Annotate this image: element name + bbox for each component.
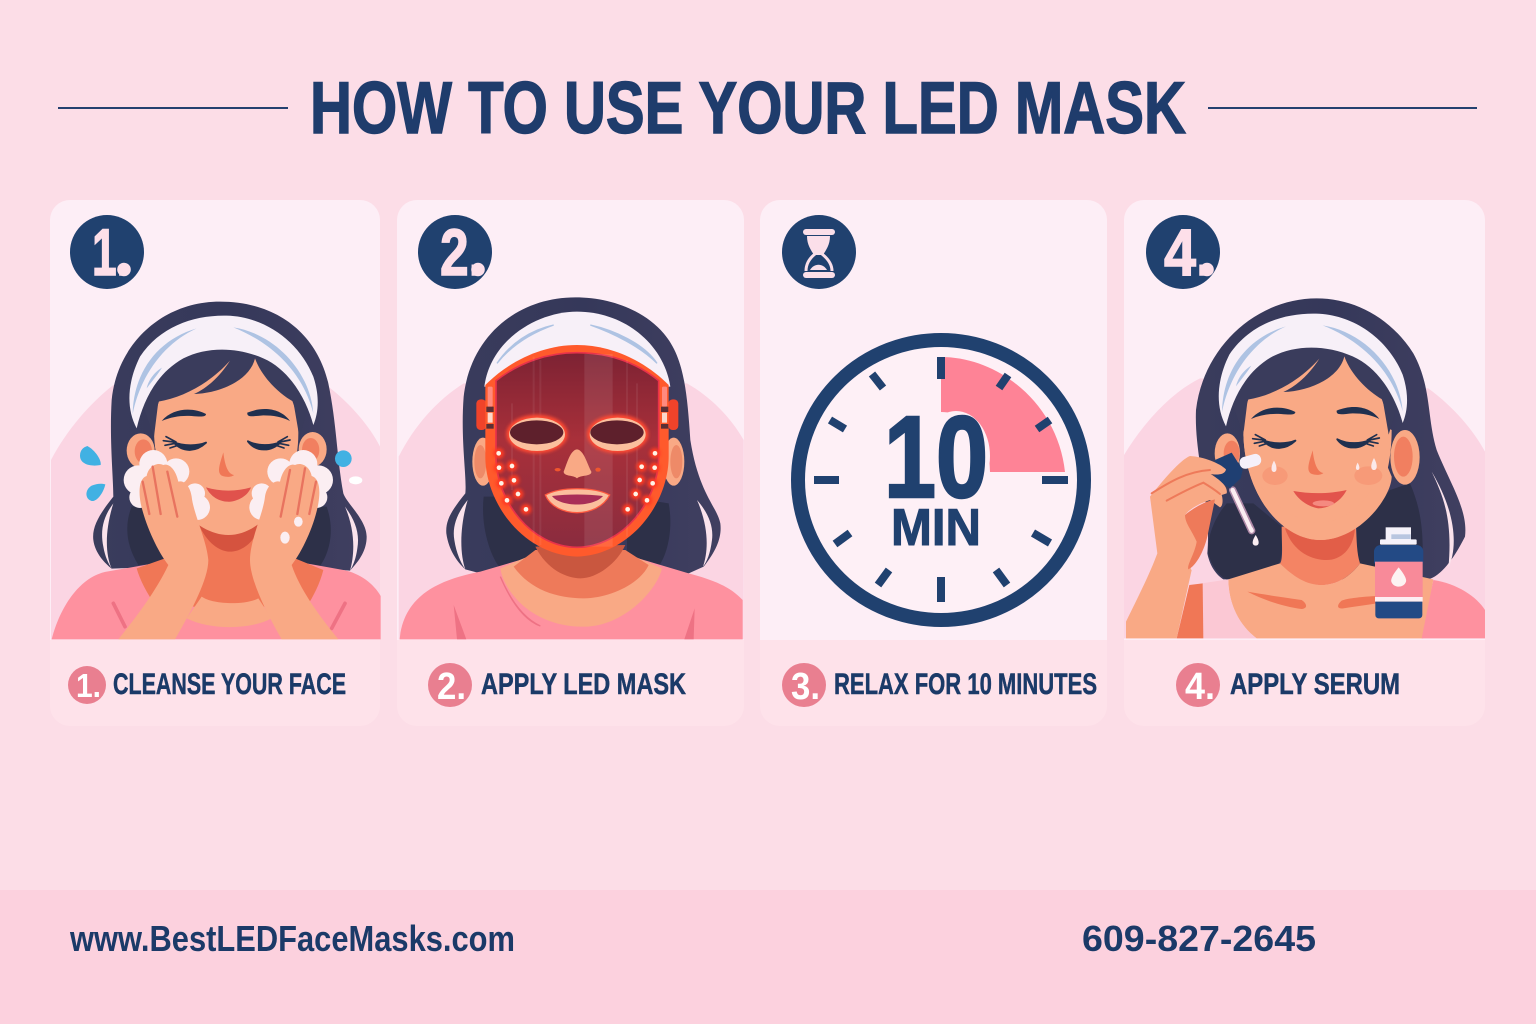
caption: cleanse your face bbox=[68, 666, 346, 704]
caption: apply LED mask: APPLY LED MASK bbox=[481, 668, 686, 701]
step number badge 1: 1. bbox=[92, 215, 129, 289]
caption: apply serum bbox=[1176, 663, 1400, 708]
nose opening bbox=[564, 449, 591, 478]
mouth opening bbox=[545, 489, 610, 513]
timer value: 10 bbox=[884, 392, 988, 522]
step number badge 4: 4. bbox=[1164, 215, 1212, 289]
icon: hourglass badge bbox=[782, 215, 856, 289]
illustration: woman cleansing face bbox=[51, 302, 381, 639]
panel: step 4 apply serum bbox=[1124, 200, 1485, 726]
timer value bbox=[884, 392, 990, 557]
caption: cleanse your face: CLEANSE YOUR FACE bbox=[113, 668, 346, 701]
panel: step 1 cleanse bbox=[50, 200, 381, 726]
step number badge 2 bbox=[418, 215, 492, 289]
caption: relax for 10 minutes bbox=[782, 663, 1097, 708]
caption: apply serum: APPLY SERUM bbox=[1230, 668, 1400, 701]
step number badge 2: 2. bbox=[440, 215, 483, 289]
foam right bbox=[249, 450, 333, 520]
caption: apply serum: 4. bbox=[1185, 666, 1215, 708]
LED mask bbox=[476, 345, 678, 557]
step number badge 1 bbox=[70, 215, 144, 289]
chart: 10 minute timer bbox=[798, 340, 1084, 620]
dropper bbox=[1215, 453, 1263, 546]
panel: step 2 apply mask bbox=[397, 200, 744, 726]
caption: cleanse your face: 1. bbox=[76, 667, 101, 704]
left hand bbox=[118, 464, 208, 639]
clock tick marks bbox=[814, 357, 1068, 602]
water drops bbox=[80, 446, 362, 501]
eye openings bbox=[506, 415, 648, 453]
serum bottle bbox=[1374, 527, 1423, 618]
website: www.BestLEDFaceMasks.com bbox=[69, 918, 515, 959]
highlighted ten-minute wedge bbox=[941, 357, 1065, 472]
illustration: woman applying serum bbox=[1124, 298, 1485, 638]
hand holding dropper bbox=[1126, 456, 1227, 638]
phone number: 609-827-2645 bbox=[1082, 918, 1316, 959]
right hand bbox=[250, 464, 338, 639]
footer band bbox=[0, 890, 1536, 1024]
caption: relax for 10 minutes: 3. bbox=[791, 666, 820, 708]
title: HOW TO USE YOUR LED MASK bbox=[310, 68, 1186, 149]
caption: relax for 10 minutes: RELAX FOR 10 MINUTES bbox=[834, 668, 1097, 701]
caption: apply LED mask bbox=[428, 663, 686, 708]
foam left bbox=[124, 450, 210, 520]
illustration: woman wearing LED mask bbox=[399, 297, 744, 639]
caption: apply LED mask: 2. bbox=[437, 666, 466, 708]
timer value: MIN bbox=[891, 499, 981, 557]
panel: step 3 relax timer bbox=[760, 200, 1107, 726]
LED dots bbox=[493, 448, 660, 515]
